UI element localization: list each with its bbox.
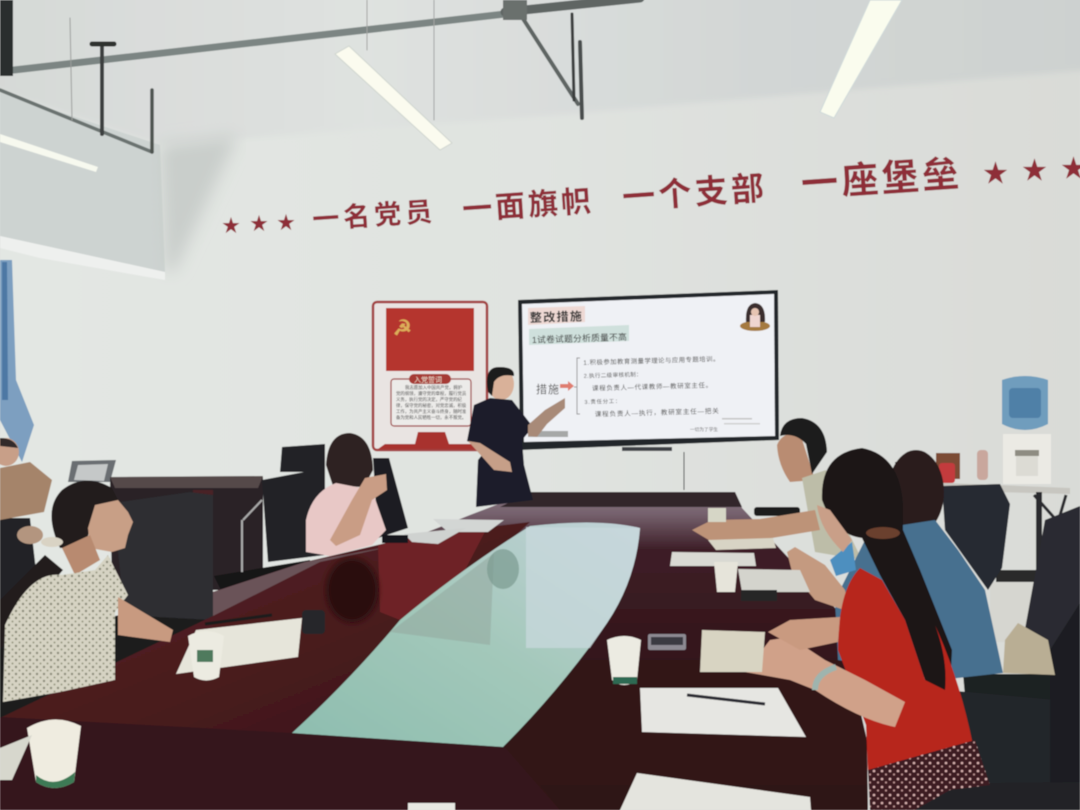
- red wall slogan with stars: 一座堡垒: [800, 153, 960, 205]
- reflection of seated woman: [326, 558, 378, 622]
- document with pen: [640, 688, 806, 737]
- slide body: 1.积极参加教育测量学理论与应用专题培训。: [583, 354, 719, 367]
- ceiling lights: [0, 0, 902, 172]
- slide body: 2.执行二级审核机制：: [584, 370, 642, 380]
- notebook: [700, 630, 765, 672]
- slide subtitle: 1试卷试题分析质量不高: [532, 331, 627, 345]
- wall display screen: [518, 290, 779, 490]
- left paper set: [176, 610, 325, 674]
- presenter standing: [467, 367, 565, 507]
- oath text: 律，保守党的秘密，对党忠诚，积极: [396, 402, 467, 409]
- chairs right background: [754, 462, 1080, 810]
- woman in red foreground: [745, 448, 990, 810]
- window curtain left: [0, 260, 34, 462]
- pink shirt seated woman: [306, 433, 387, 556]
- slide subtitle: [529, 325, 629, 345]
- conference table: [0, 492, 868, 810]
- dark area under left table edge: [0, 615, 213, 722]
- skirt: [868, 740, 990, 810]
- slide body: 措施: [536, 382, 559, 396]
- papers and items far table: [382, 519, 504, 544]
- party poster board: [373, 302, 487, 450]
- forearm and hands: [745, 637, 905, 727]
- reflection of poster: [378, 522, 490, 620]
- slide body: 3.责任分工：: [584, 397, 621, 406]
- red wall slogan with stars: ★: [222, 216, 240, 236]
- slide title: 整改措施: [530, 308, 582, 325]
- hands of woman in red reaching table: [787, 547, 850, 612]
- slide body: 一切为了学生: [690, 426, 718, 433]
- sideboard items: [936, 450, 988, 483]
- red wall slogan with stars: [222, 153, 1080, 236]
- red wall slogan with stars: ★: [983, 160, 1008, 188]
- right papers and cup: [670, 552, 756, 566]
- red wall slogan with stars: ★: [250, 214, 268, 234]
- woman far left corner: [0, 438, 52, 520]
- paper bottom: [620, 773, 811, 810]
- woman in blue seated behind: [830, 450, 1003, 680]
- cup bottom-left: [27, 719, 81, 788]
- oath text: 工作，为共产主义奋斗终身，随时准: [396, 408, 467, 415]
- ceiling pipes and brackets: [0, 0, 640, 152]
- party flag with hammer and sickle: [386, 308, 474, 371]
- oath text: 党的纲领，遵守党的章程，履行党员: [396, 390, 467, 397]
- slide body: [536, 354, 721, 433]
- documents and cups on table: [0, 508, 811, 810]
- red wall slogan with stars: 一面旗帜: [461, 185, 592, 227]
- bag on chair: [1003, 623, 1055, 675]
- cup near left paper: [188, 631, 224, 680]
- slide body: 课程负责人—执行，教研室主任—把关: [595, 406, 719, 419]
- chairs left background: [0, 444, 408, 722]
- party poster board: 入党誓词: [414, 375, 442, 384]
- center cup: [607, 636, 641, 685]
- glass inlay: [292, 522, 640, 747]
- red wall slogan with stars: 一名党员: [311, 197, 433, 235]
- side table right: [922, 482, 1070, 582]
- party flag with hammer and sickle: ☭: [393, 317, 412, 340]
- woman in floral dress left: [0, 480, 173, 702]
- man in beige shirt: [692, 418, 862, 560]
- sideboard: [110, 477, 263, 590]
- water dispenser: [1002, 376, 1051, 484]
- oath text: 我志愿加入中国共产党，拥护: [405, 384, 463, 391]
- red wall slogan with stars: ★: [1022, 157, 1047, 185]
- red wall slogan with stars: 一个支部: [621, 169, 765, 216]
- slide body: 课程负责人—代课教师—教研室主任。: [592, 380, 712, 393]
- hair and head: [822, 448, 952, 691]
- oath text: 备为党和人民牺牲一切，永不叛党。: [396, 414, 466, 421]
- red wall slogan with stars: ★: [277, 213, 295, 233]
- slide illustration: [740, 303, 770, 331]
- oath text: 义务，执行党的决定，严守党的纪: [396, 396, 462, 403]
- red top: [838, 568, 973, 772]
